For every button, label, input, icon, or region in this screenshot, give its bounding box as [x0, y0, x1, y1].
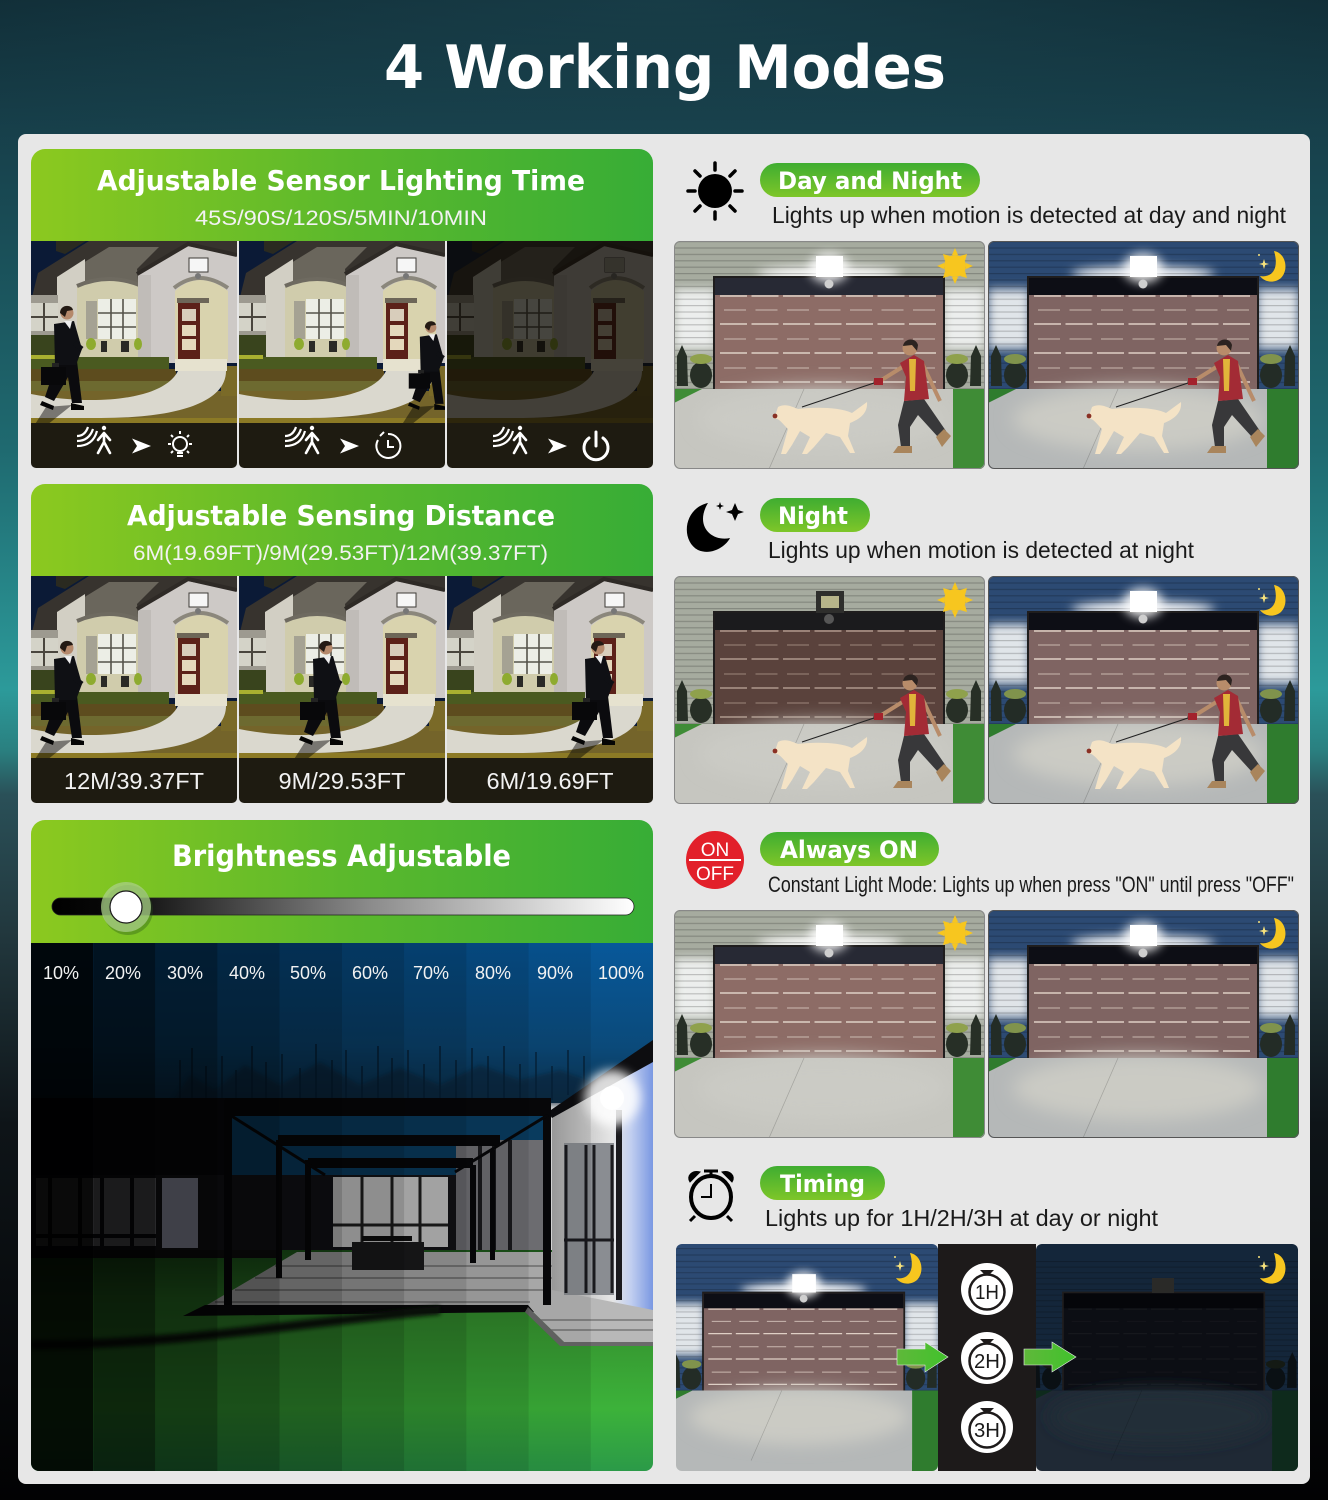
description: Lights up for 1H/2H/3H at day or night [765, 1205, 1159, 1231]
mode: timing [668, 1166, 1300, 1471]
arrow: into timer [897, 1342, 948, 1372]
percentage labels: 20% [105, 963, 141, 983]
percentage labels: 60% [352, 963, 388, 983]
timer 3h [961, 1401, 1013, 1453]
panel: brightness adjustable [31, 820, 653, 1471]
arrow: out of timer [1024, 1342, 1076, 1372]
pill label [760, 1166, 885, 1200]
scene: 9m [239, 576, 445, 803]
mode: night [674, 498, 1299, 804]
mode: day and night [674, 163, 1299, 469]
day photo with light off [674, 576, 985, 804]
heading band [31, 820, 653, 950]
scene: 6m [447, 576, 653, 803]
title: 4 Working Modes [384, 33, 946, 103]
scene: 12m [31, 576, 237, 803]
timer 2h: 2H [974, 1351, 1000, 1373]
heading band [31, 149, 653, 241]
options text: 45S/90S/120S/5MIN/10MIN [195, 207, 487, 230]
panel: adjustable sensor lighting time [31, 149, 653, 468]
scene: light on [31, 241, 237, 468]
brightness dimming strips [31, 943, 591, 1471]
percentage labels: 80% [475, 963, 511, 983]
heading: Brightness Adjustable [172, 839, 511, 873]
pill label: Timing [780, 1170, 865, 1198]
percentage labels: 50% [290, 963, 326, 983]
icon: motion then power off [493, 426, 608, 460]
percentage labels: 30% [167, 963, 203, 983]
pill label [760, 832, 939, 866]
scene: light off [447, 241, 653, 468]
options text: 6M(19.69FT)/9M(29.53FT)/12M(39.37FT) [133, 542, 548, 565]
lit night photo [668, 1244, 940, 1471]
description: Lights up when motion is detected at day and night [772, 202, 1287, 228]
percentage labels: 70% [413, 963, 449, 983]
icon: motion then timer [285, 426, 400, 458]
night photo [988, 910, 1299, 1138]
pill label [760, 498, 870, 532]
icon: motion then bulb [77, 426, 192, 456]
pill label: Night [778, 502, 848, 530]
timer 3h: 3H [974, 1420, 1000, 1442]
timer 1h: 1H [975, 1282, 999, 1304]
distance labels: 12M/39.37FT [64, 768, 204, 794]
percentage labels: 40% [229, 963, 265, 983]
brightness slider [52, 882, 634, 935]
icon: on off button [686, 831, 744, 889]
panel: adjustable sensing distance [31, 484, 653, 803]
icon: alarm clock [689, 1171, 733, 1221]
percentage labels: 90% [537, 963, 573, 983]
scene: light stays on [239, 241, 445, 468]
day photo [674, 241, 985, 469]
timer 1h [961, 1263, 1013, 1315]
timer 2h [961, 1332, 1013, 1384]
pill label: Always ON [780, 836, 918, 864]
day photo [674, 910, 985, 1138]
pill label: Day and Night [778, 167, 962, 195]
dark night photo [1028, 1244, 1300, 1471]
heading band [31, 484, 653, 576]
night photo [988, 241, 1299, 469]
heading: Adjustable Sensing Distance [127, 499, 555, 532]
night photo [988, 576, 1299, 804]
icon: sun [688, 163, 742, 219]
icon: on off button: OFF [696, 864, 734, 885]
percentage labels [43, 963, 644, 983]
percentage labels: 10% [43, 963, 79, 983]
mode: always on [674, 831, 1299, 1138]
icon: moon [687, 502, 744, 552]
distance labels: 6M/19.69FT [486, 768, 614, 794]
heading: Adjustable Sensor Lighting Time [97, 164, 585, 197]
icon: on off button: ON [701, 840, 729, 861]
distance labels: 9M/29.53FT [278, 768, 406, 794]
percentage labels: 100% [598, 963, 644, 983]
description: Lights up when motion is detected at night [768, 537, 1195, 563]
timer strip [938, 1244, 1036, 1471]
distance labels [64, 768, 614, 794]
brightness photo [31, 943, 653, 1471]
